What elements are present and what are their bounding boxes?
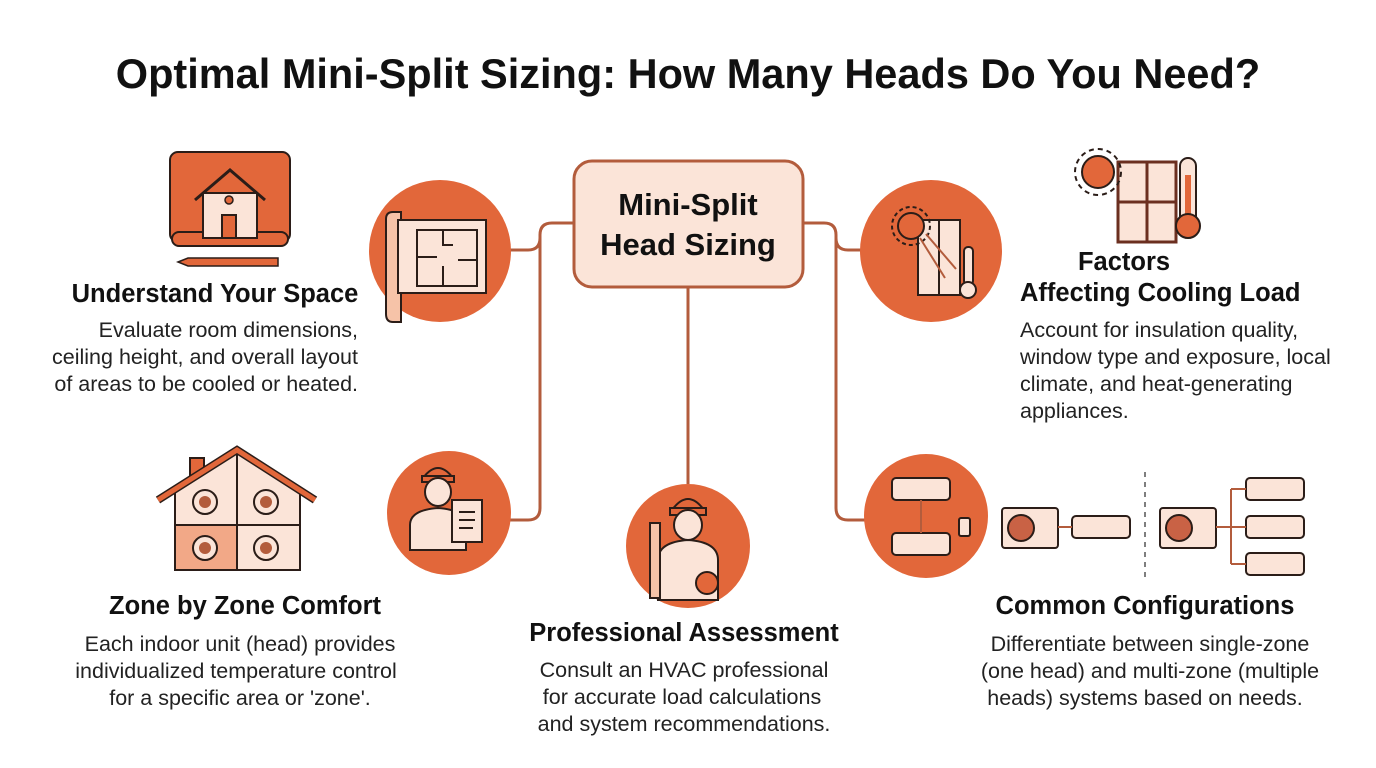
- icon circle: sun window thermometer: [860, 180, 1002, 322]
- central box: Head Sizing: [600, 227, 776, 262]
- text: understand your space: [52, 318, 358, 396]
- icon circle: technician with clipboard: [387, 451, 511, 575]
- central box: [574, 161, 803, 287]
- text: professional assessment: and system recommendations.: [538, 712, 830, 736]
- icon circle: floor plan: [369, 180, 511, 322]
- text: professional assessment: Consult an HVAC professional: [540, 658, 828, 682]
- text: common configurations: Differentiate between single-zone: [991, 632, 1309, 656]
- text: zone by zone comfort: for a specific area or 'zone'.: [109, 686, 371, 710]
- icon: house with zones: [158, 450, 315, 570]
- text: professional assessment: [538, 658, 830, 736]
- central box: Mini-Split: [618, 187, 758, 222]
- heading: understand your space: Understand Your Space: [72, 280, 358, 308]
- text: factors: window type and exposure, local: [1019, 345, 1331, 369]
- icon circle: professional with tape: [626, 484, 750, 608]
- text: common configurations: heads) systems based on needs.: [987, 686, 1303, 710]
- icon: blueprint house: [170, 152, 290, 266]
- text: zone by zone comfort: individualized temperature control: [75, 659, 397, 683]
- heading: factors affecting cooling load: Factors: [1078, 248, 1170, 276]
- icon: system configurations: [1002, 472, 1304, 578]
- text: factors: Account for insulation quality,: [1020, 318, 1298, 342]
- heading: common configurations: Common Configurations: [996, 592, 1294, 620]
- text: professional assessment: for accurate load calculations: [543, 685, 821, 709]
- heading: factors affecting cooling load: Affecting Cooling Load: [1020, 279, 1300, 307]
- text: understand your space: of areas to be cooled or heated.: [54, 372, 358, 396]
- text: zone by zone comfort: Each indoor unit (head) provides: [85, 632, 395, 656]
- title: Optimal Mini-Split Sizing: How Many Heads Do You Need?: [116, 50, 1260, 97]
- icon: sun window thermometer large: [1075, 149, 1200, 242]
- text: understand your space: ceiling height, and overall layout: [52, 345, 358, 369]
- text: factors: appliances.: [1020, 399, 1129, 423]
- text: factors: [1019, 318, 1331, 423]
- heading: zone by zone comfort: Zone by Zone Comfort: [109, 592, 381, 620]
- heading: factors affecting cooling load: [1020, 248, 1300, 307]
- text: zone by zone comfort: [75, 632, 397, 710]
- heading: professional assessment: Professional Assessment: [529, 619, 839, 647]
- text: factors: climate, and heat-generating: [1020, 372, 1293, 396]
- text: understand your space: Evaluate room dimensions,: [99, 318, 358, 342]
- icon circle: indoor units: [864, 454, 988, 578]
- text: common configurations: [981, 632, 1319, 710]
- connector lines: [510, 223, 866, 520]
- text: common configurations: (one head) and multi-zone (multiple: [981, 659, 1319, 683]
